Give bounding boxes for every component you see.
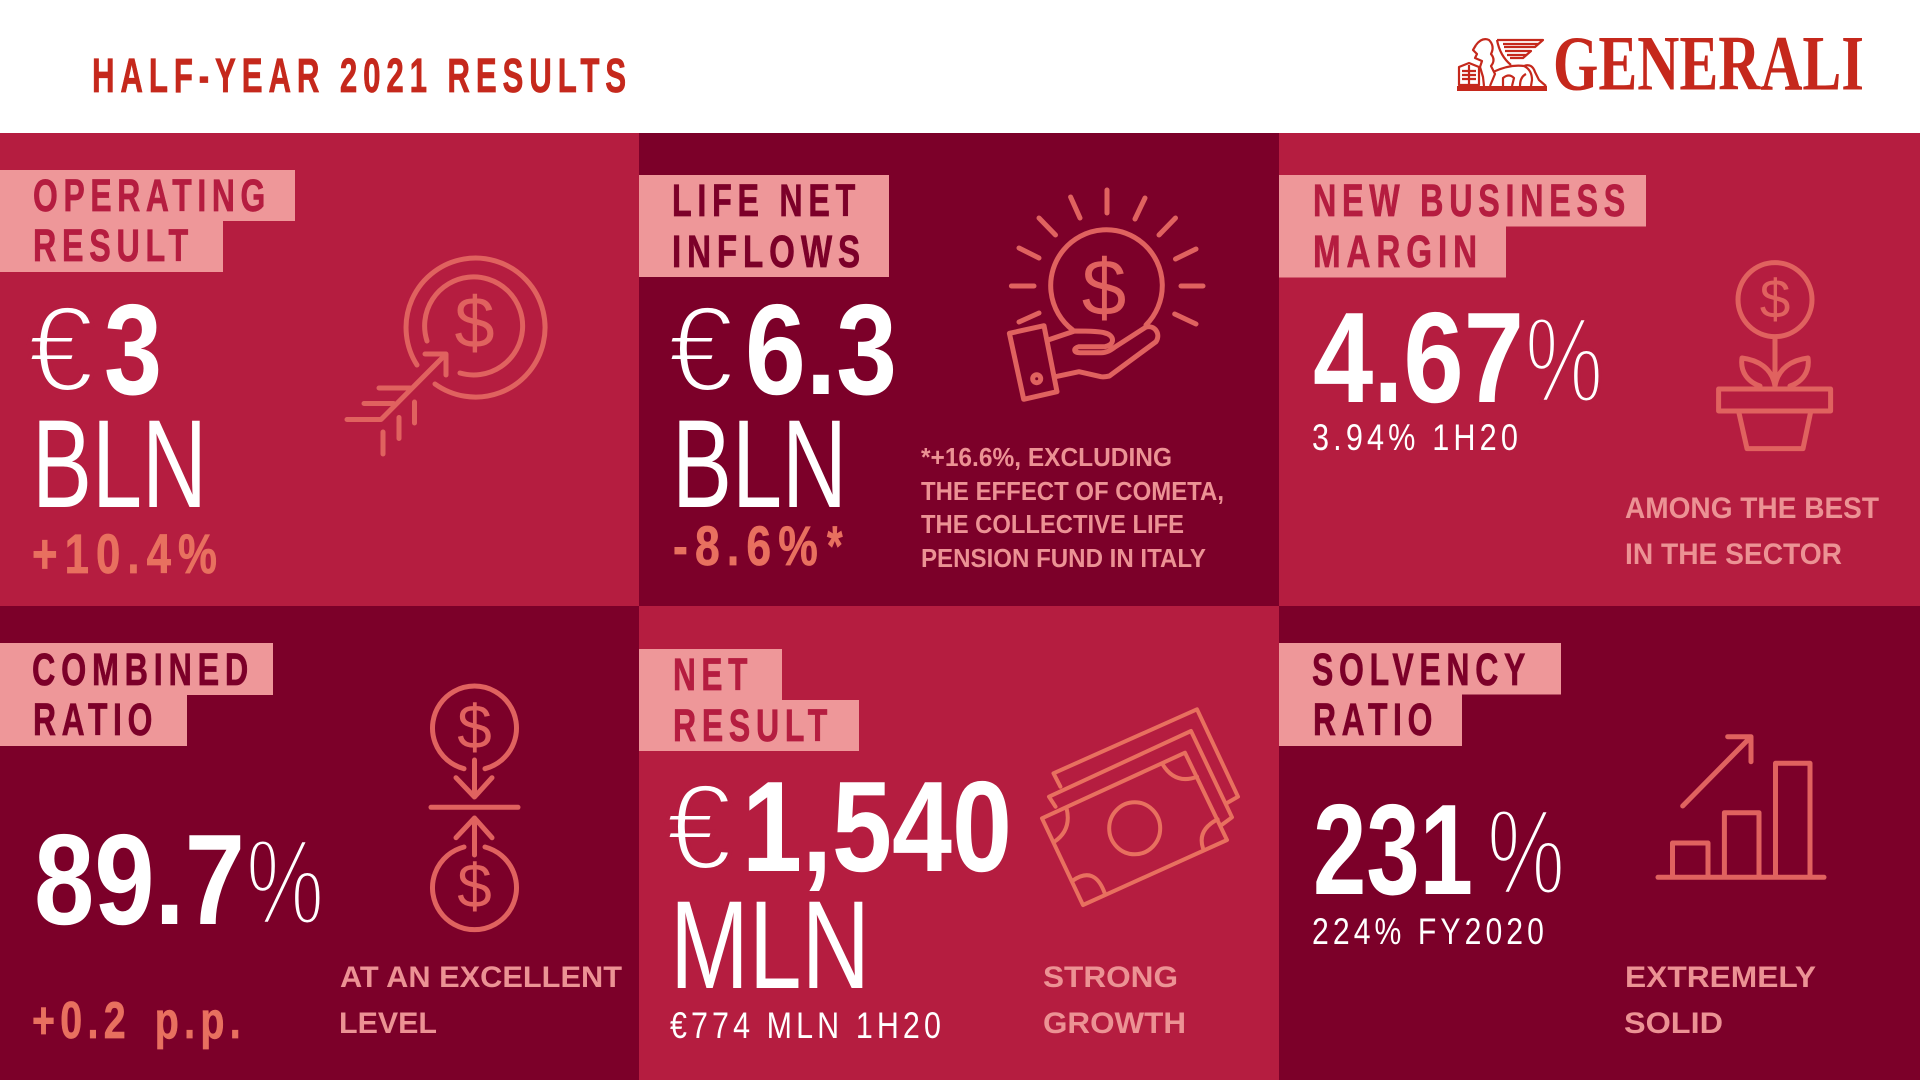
value: 3 billion euro: 3 bbox=[104, 278, 162, 422]
title: HALF-YEAR 2021 RESULTS bbox=[92, 50, 632, 103]
heading label: combined ratio: COMBINED bbox=[32, 644, 254, 695]
heading label: net result bbox=[639, 649, 859, 751]
logo: Generali lion and wordmark bbox=[1457, 20, 1864, 106]
icon: rising bar chart with arrow bbox=[1658, 737, 1824, 877]
value: 1,540 million euro: MLN bbox=[670, 876, 870, 1015]
panel: combined ratio bbox=[0, 606, 640, 1080]
icon: stack of banknotes bbox=[1042, 709, 1238, 905]
change: -8.6%*: -8.6% bbox=[673, 514, 825, 577]
heading label: new business margin: NEW BUSINESS bbox=[1313, 175, 1631, 226]
icon: arrow hitting coin target bbox=[347, 258, 545, 454]
value: 3 billion euro: € bbox=[28, 281, 94, 417]
heading label: net result: RESULT bbox=[673, 700, 833, 751]
caption: AMONG THE BEST bbox=[1625, 492, 1879, 525]
caption bbox=[1043, 961, 1186, 1040]
icon: winged lion with book bbox=[1457, 39, 1547, 91]
heading label: operating result bbox=[0, 170, 295, 272]
icon: plant growing a coin: $ bbox=[1760, 268, 1790, 330]
heading label: solvency ratio bbox=[1279, 643, 1561, 746]
value: 1,540 million euro: 1,540 bbox=[742, 755, 1012, 899]
icon: arrow hitting coin target: $ bbox=[454, 284, 495, 364]
icon: hand holding shining coin: $ bbox=[1082, 243, 1126, 332]
panel: operating result bbox=[0, 133, 640, 607]
icon: two coins converging on a line: $ bbox=[457, 852, 492, 922]
icon: plant growing a coin bbox=[1719, 263, 1831, 449]
icon: two coins converging on a line: $ bbox=[457, 694, 492, 762]
comparison: 774 million euro 1H20: €774 MLN 1H20 bbox=[670, 1005, 945, 1046]
comparison: 224% FY2020: 224% FY2020 bbox=[1312, 911, 1548, 952]
footnote: PENSION FUND IN ITALY bbox=[921, 543, 1206, 573]
value: 6.3 billion euro bbox=[668, 278, 897, 534]
value: 3 billion euro: BLN bbox=[32, 395, 207, 534]
footnote: *+16.6%, EXCLUDING bbox=[921, 442, 1172, 472]
panel: solvency ratio bbox=[1279, 606, 1920, 1080]
value: 231%: % bbox=[1487, 784, 1565, 920]
value: 1,540 million euro: € bbox=[666, 759, 732, 895]
heading label: operating result: RESULT bbox=[33, 220, 194, 271]
caption: STRONG bbox=[1043, 961, 1178, 994]
heading label: life net inflows: LIFE NET bbox=[672, 175, 861, 226]
value: 89.7%: 89.7 bbox=[34, 808, 245, 952]
panel: net result bbox=[639, 606, 1279, 1080]
caption: IN THE SECTOR bbox=[1625, 538, 1842, 571]
heading label: combined ratio: RATIO bbox=[33, 694, 158, 745]
change: +0.2 p.p.: +0.2 p.p. bbox=[32, 992, 246, 1050]
footnote: THE COLLECTIVE LIFE bbox=[921, 509, 1184, 539]
icon: hand holding shining coin bbox=[1009, 190, 1203, 399]
value: 1,540 million euro bbox=[666, 755, 1012, 1015]
caption bbox=[1625, 492, 1879, 571]
caption: SOLID bbox=[1624, 1007, 1723, 1040]
value: 3 billion euro bbox=[28, 278, 207, 534]
value: 4.67%: % bbox=[1525, 292, 1603, 428]
value: 4.67%: 4.67 bbox=[1313, 286, 1524, 430]
heading label: combined ratio bbox=[0, 643, 273, 746]
heading label: new business margin: MARGIN bbox=[1313, 226, 1483, 277]
heading label: solvency ratio: SOLVENCY bbox=[1312, 644, 1531, 695]
heading label: operating result: OPERATING bbox=[33, 170, 271, 221]
footnote bbox=[921, 442, 1224, 573]
caption bbox=[339, 961, 622, 1040]
caption bbox=[1624, 961, 1816, 1040]
heading label: solvency ratio: RATIO bbox=[1313, 694, 1438, 745]
comparison: 3.94% 1H20: 3.94% 1H20 bbox=[1312, 417, 1522, 458]
change: -8.6%*: * bbox=[827, 514, 849, 577]
heading label: net result: NET bbox=[673, 649, 753, 700]
heading label: life net inflows bbox=[639, 175, 889, 277]
icon: two coins converging on a line bbox=[431, 686, 518, 930]
caption: GROWTH bbox=[1043, 1007, 1186, 1040]
value: 231%: 231 bbox=[1313, 778, 1473, 922]
value: 6.3 billion euro: € bbox=[668, 281, 734, 417]
caption: AT AN EXCELLENT bbox=[340, 961, 622, 994]
value: 6.3 billion euro: 6.3 bbox=[745, 278, 897, 422]
value: 89.7%: % bbox=[246, 814, 324, 950]
heading label: life net inflows: INFLOWS bbox=[672, 226, 866, 277]
change: +10.4%: +10.4% bbox=[32, 522, 224, 585]
caption: EXTREMELY bbox=[1625, 961, 1816, 994]
value: 6.3 billion euro: BLN bbox=[672, 395, 847, 534]
heading label: new business margin bbox=[1279, 175, 1646, 278]
caption: LEVEL bbox=[339, 1007, 437, 1040]
panel: new business margin bbox=[1279, 133, 1920, 607]
footnote: THE EFFECT OF COMETA, bbox=[921, 476, 1224, 506]
panel: life net inflows bbox=[639, 133, 1279, 607]
